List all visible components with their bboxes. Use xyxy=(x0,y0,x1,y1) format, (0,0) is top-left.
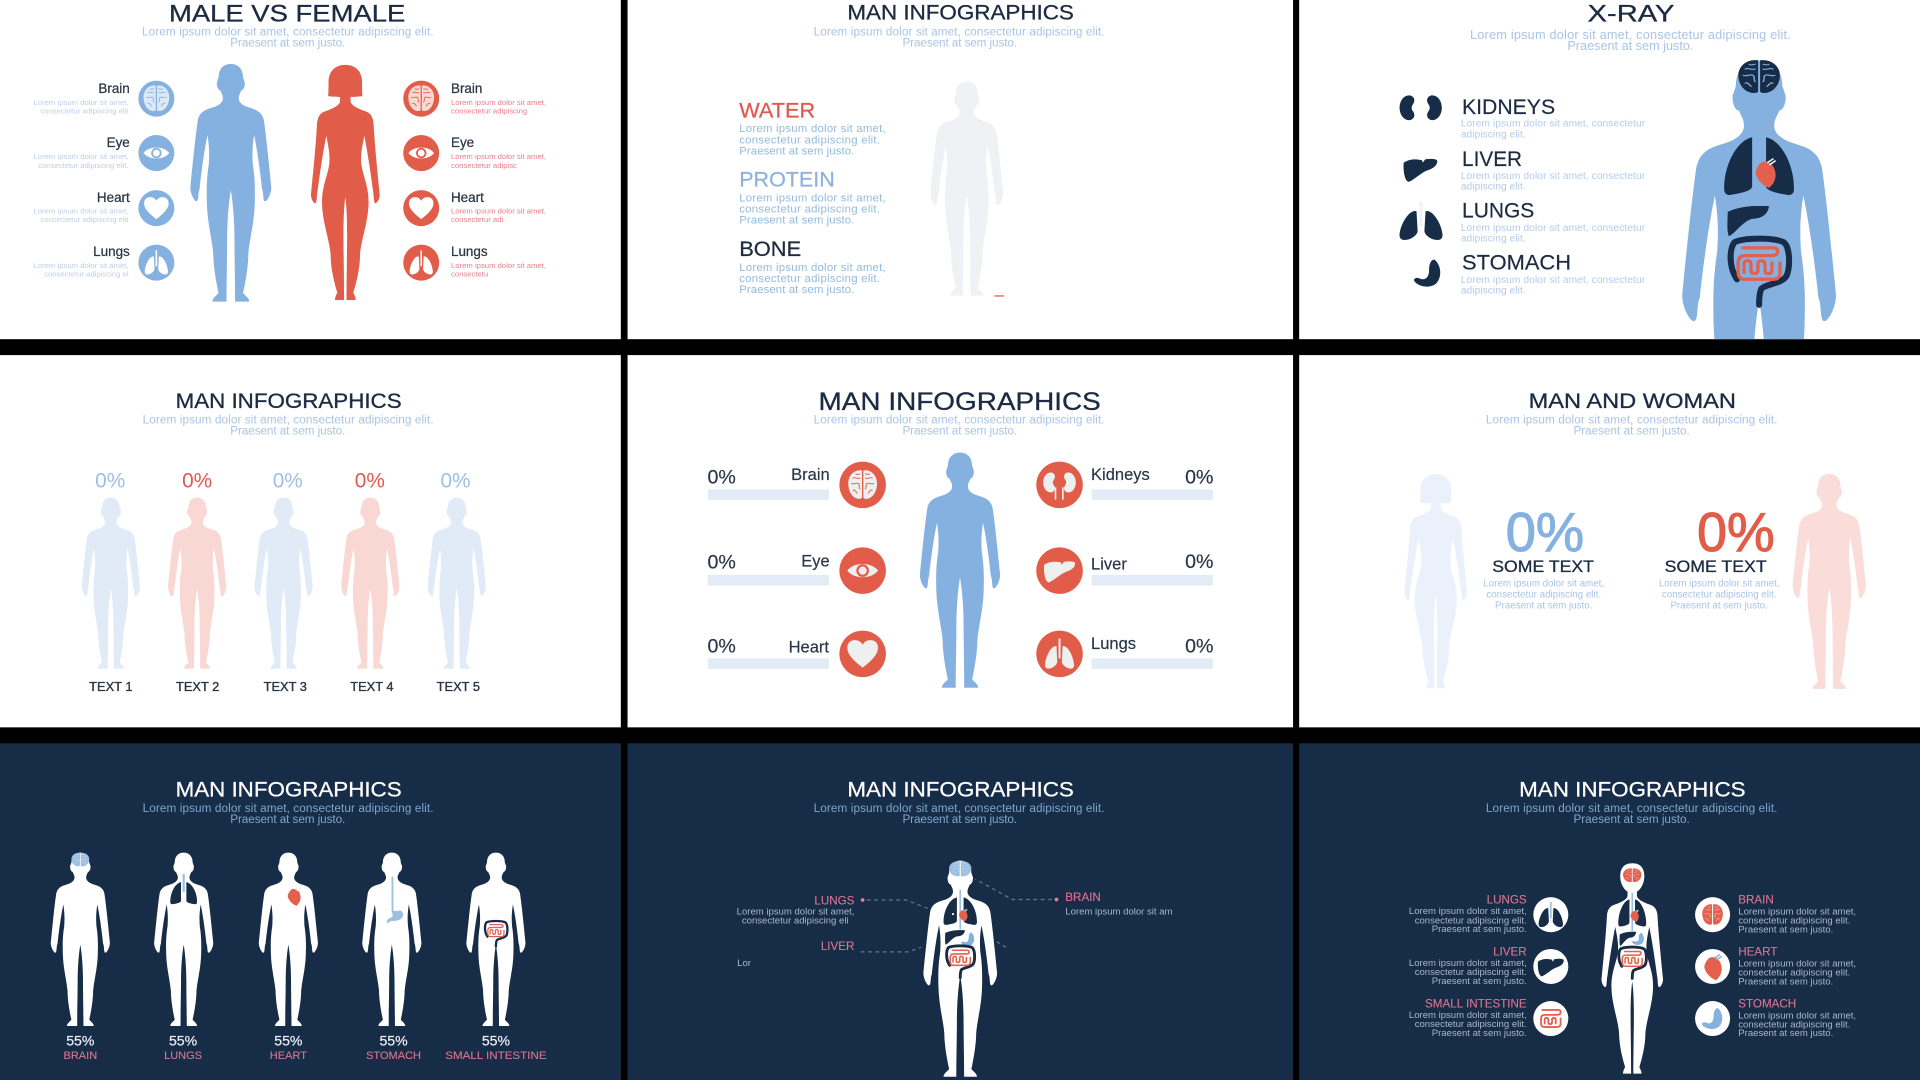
figure: x-ray man with organs xyxy=(1682,60,1836,340)
item: heart xyxy=(1695,945,1856,987)
figure: woman with organs xyxy=(1601,863,1663,1074)
block: water: Lorem ipsum dolor sit amet, xyxy=(739,123,886,135)
block: bone: consectetur adipiscing elit. xyxy=(739,273,880,285)
row: liver: Liver xyxy=(1091,554,1127,573)
block: water: consectetur adipiscing elit. xyxy=(739,134,880,146)
row: kidneys: Kidneys xyxy=(1091,465,1150,484)
item: small intestine: consectetur adipiscing elit. xyxy=(1415,1019,1527,1030)
title: MAN INFOGRAPHICS xyxy=(819,388,1101,416)
left item: brain: consectetur adipiscing elit xyxy=(40,107,129,116)
panel: male vs female xyxy=(0,0,621,339)
subtitle: Lorem ipsum dolor sit amet, consectetur adipiscing elit. xyxy=(143,802,433,815)
item: brain: Lorem ipsum dolor sit amet, xyxy=(1738,906,1856,917)
item: stomach xyxy=(1461,250,1646,297)
block: water: WATER xyxy=(739,99,815,122)
icon: lungs xyxy=(1400,201,1443,240)
icon: kidneys xyxy=(1400,95,1442,120)
row: liver: 0% xyxy=(1185,551,1213,573)
icon: liver xyxy=(1404,159,1437,182)
column 5 xyxy=(428,469,486,694)
figure: stomach 55%: 55% xyxy=(379,1033,408,1049)
item: stomach: STOMACH xyxy=(1738,998,1796,1011)
figure: small intestine 55%: 55% xyxy=(482,1033,510,1049)
column 3: 0% xyxy=(273,469,303,492)
left item: eye: Eye xyxy=(107,135,130,150)
subtitle: Praesent at sem justo. xyxy=(230,813,345,826)
panel: five figures percentages xyxy=(0,355,621,727)
subtitle: Lorem ipsum dolor sit amet, consectetur adipiscing elit. xyxy=(1470,27,1791,42)
block: protein: Praesent at sem justo. xyxy=(739,215,854,227)
figure: brain 55% xyxy=(51,853,110,1062)
figure: lungs 55%: 55% xyxy=(169,1033,198,1049)
callout: lungs: LUNGS xyxy=(814,895,855,908)
right item: eye: consectetur adipisc xyxy=(451,161,517,170)
figure: man xyxy=(920,453,1000,688)
panel: dark five organ figures xyxy=(0,743,621,1080)
stat: left: 0% xyxy=(1506,501,1584,563)
title: X-RAY xyxy=(1588,0,1674,27)
figure: small intestine 55%: SMALL INTESTINE xyxy=(445,1050,547,1062)
stat: left: SOME TEXT xyxy=(1492,557,1594,576)
left item: eye xyxy=(34,135,174,171)
item: brain: BRAIN xyxy=(1738,894,1774,907)
left item: lungs: consectetur adipiscing el xyxy=(44,270,129,279)
subtitle: Praesent at sem justo. xyxy=(230,37,345,50)
item: stomach: Praesent at sem justo. xyxy=(1738,1028,1833,1039)
item: lungs: LUNGS xyxy=(1487,894,1527,907)
block: bone: BONE xyxy=(739,238,801,261)
subtitle xyxy=(1486,414,1777,438)
stat: right: SOME TEXT xyxy=(1665,557,1767,576)
row: kidneys: 0% xyxy=(1185,466,1213,488)
callout: liver: Lor xyxy=(737,958,752,969)
left item: heart: consectetur adipiscing elit xyxy=(40,215,129,224)
item: lungs: Lorem ipsum dolor sit amet, xyxy=(1409,906,1527,917)
figure: lungs 55%: LUNGS xyxy=(164,1050,202,1062)
right item: eye xyxy=(403,135,546,171)
item: lungs xyxy=(1461,199,1646,245)
subtitle: Lorem ipsum dolor sit amet, consectetur adipiscing elit. xyxy=(814,802,1104,815)
figure: brain 55%: BRAIN xyxy=(63,1050,97,1062)
left item: lungs xyxy=(34,244,174,281)
figure: heart 55%: 55% xyxy=(274,1033,303,1049)
right item: brain: Lorem ipsum dolor sit amet, xyxy=(451,98,546,107)
block: bone xyxy=(739,238,886,296)
subtitle xyxy=(814,413,1104,438)
title: MAN INFOGRAPHICS xyxy=(847,2,1074,25)
row: lungs: 0% xyxy=(1185,636,1213,658)
item: liver: Lorem ipsum dolor sit amet, xyxy=(1409,958,1527,969)
row: heart: 0% xyxy=(708,636,736,658)
block: bone: Praesent at sem justo. xyxy=(739,284,854,296)
connector stub xyxy=(997,942,1006,947)
item: lungs: LUNGS xyxy=(1462,199,1534,223)
column 1: 0% xyxy=(95,469,125,492)
figure: lungs 55% xyxy=(154,853,213,1062)
subtitle: Praesent at sem justo. xyxy=(902,425,1017,438)
item: liver: consectetur adipiscing elit. xyxy=(1415,967,1527,978)
title: male vs female: MALE VS FEMALE xyxy=(169,1,405,28)
item: liver: Lorem ipsum dolor sit amet, consectetur xyxy=(1461,171,1646,182)
item: stomach: STOMACH xyxy=(1462,250,1571,274)
figure: male xyxy=(190,64,271,302)
item: stomach xyxy=(1695,998,1856,1039)
item: kidneys: adipiscing elit. xyxy=(1461,130,1526,141)
left item: brain: Lorem ipsum dolor sit amet, xyxy=(34,98,129,107)
column 5: TEXT 5 xyxy=(437,679,480,694)
right item: brain: Brain xyxy=(451,81,482,96)
item: brain: consectetur adipiscing elit. xyxy=(1738,916,1850,927)
right item: eye: Eye xyxy=(451,135,474,150)
row: heart: Heart xyxy=(789,637,829,656)
item: liver xyxy=(1409,945,1568,987)
subtitle xyxy=(143,414,433,438)
block: protein: Lorem ipsum dolor sit amet, xyxy=(739,193,886,205)
column 3 xyxy=(254,469,313,694)
panel: x-ray xyxy=(1299,0,1920,340)
subtitle: Lorem ipsum dolor sit amet, consectetur adipiscing elit. xyxy=(142,26,433,39)
figure: stomach 55%: STOMACH xyxy=(366,1050,421,1062)
figure: stomach 55% xyxy=(362,853,421,1062)
left item: heart: Heart xyxy=(97,190,130,205)
item: small intestine: Lorem ipsum dolor sit amet, xyxy=(1409,1010,1527,1021)
figure: small intestine 55% xyxy=(445,853,547,1062)
figure: man with organs xyxy=(923,861,997,1077)
item: lungs xyxy=(1409,894,1568,935)
row: brain: 0% xyxy=(708,466,736,488)
item: heart: Praesent at sem justo. xyxy=(1738,976,1833,987)
figure: brain 55%: 55% xyxy=(66,1033,95,1049)
item: lungs: Lorem ipsum dolor sit amet, consectetur xyxy=(1461,223,1646,234)
subtitle: Lorem ipsum dolor sit amet, consectetur adipiscing elit. xyxy=(814,413,1104,426)
block: bone: Lorem ipsum dolor sit amet, xyxy=(739,262,886,274)
figure: heart 55% xyxy=(259,853,318,1062)
item: stomach: adipiscing elit. xyxy=(1461,286,1526,297)
item: small intestine xyxy=(1409,998,1568,1039)
title: MAN AND WOMAN xyxy=(1529,390,1736,413)
figure: female xyxy=(311,65,380,300)
item: stomach: Lorem ipsum dolor sit amet, xyxy=(1738,1010,1856,1021)
row: kidneys xyxy=(1036,462,1213,508)
row: lungs xyxy=(1036,631,1213,677)
figure: ghost woman xyxy=(1404,474,1467,688)
panel: man with organ progress bars xyxy=(628,355,1293,727)
callout: lungs: Lorem ipsum dolor sit amet, xyxy=(737,907,854,918)
subtitle: Praesent at sem justo. xyxy=(230,425,345,438)
title: MAN INFOGRAPHICS xyxy=(176,779,402,802)
callout: brain: BRAIN xyxy=(1065,891,1101,904)
callout: liver: LIVER xyxy=(821,940,854,953)
callout: lungs: consectetur adipiscing eli xyxy=(742,916,849,927)
figure: heart 55%: HEART xyxy=(270,1050,307,1062)
right item: lungs: Lorem ipsum dolor sit amet, xyxy=(451,261,546,270)
right item: heart: Heart xyxy=(451,190,484,205)
item: kidneys: Lorem ipsum dolor sit amet, consectetur xyxy=(1461,119,1646,130)
figure: ghost man xyxy=(930,82,1003,295)
subtitle: Praesent at sem justo. xyxy=(902,813,1017,826)
column 1: TEXT 1 xyxy=(89,679,132,694)
subtitle: Praesent at sem justo. xyxy=(1573,425,1690,438)
subtitle xyxy=(1486,802,1777,826)
right item: lungs: consectetu xyxy=(451,270,488,279)
column 4 xyxy=(341,469,399,694)
subtitle xyxy=(1470,27,1791,53)
marker: red dash xyxy=(994,295,1004,297)
block: water xyxy=(739,99,886,157)
column 2 xyxy=(168,469,226,694)
row: heart xyxy=(708,631,886,677)
stat: left: Lorem ipsum dolor sit amet, xyxy=(1483,578,1604,589)
item: lungs: adipiscing elit. xyxy=(1461,234,1526,245)
left item: eye: consectetur adipiscing elit. xyxy=(38,161,129,170)
title: MAN INFOGRAPHICS xyxy=(1519,779,1746,802)
item: liver: adipiscing elit. xyxy=(1461,182,1526,193)
panel: water protein bone xyxy=(628,0,1293,339)
item: liver: LIVER xyxy=(1462,147,1522,171)
subtitle: Praesent at sem justo. xyxy=(902,37,1017,50)
left item: heart xyxy=(34,190,174,226)
right item: brain xyxy=(403,81,546,117)
item: liver: Praesent at sem justo. xyxy=(1432,976,1527,987)
block: protein: consectetur adipiscing elit. xyxy=(739,204,880,216)
item: brain xyxy=(1695,894,1856,935)
left item: brain: Brain xyxy=(98,81,130,96)
left item: eye: Lorem ipsum dolor sit amet, xyxy=(34,152,129,161)
block: water: Praesent at sem justo. xyxy=(739,145,854,157)
panel: dark woman with organ list xyxy=(1299,743,1920,1080)
title: MAN INFOGRAPHICS xyxy=(176,390,402,413)
right item: heart: consectetur adi xyxy=(451,215,504,224)
right item: brain: consectetur adipiscing xyxy=(451,107,527,116)
stat: left: consectetur adipiscing elit. xyxy=(1486,589,1601,600)
item: stomach: Lorem ipsum dolor sit amet, consectetur xyxy=(1461,275,1646,286)
item: liver: LIVER xyxy=(1493,945,1527,958)
column 4: TEXT 4 xyxy=(350,679,394,694)
item: liver xyxy=(1461,147,1646,193)
left item: brain xyxy=(34,81,174,117)
callout: brain: Lorem ipsum dolor sit am xyxy=(1065,907,1173,918)
stat: right: Praesent at sem justo. xyxy=(1671,600,1768,611)
item: kidneys: KIDNEYS xyxy=(1462,95,1555,119)
panel: dark man with callouts xyxy=(628,743,1293,1080)
subtitle xyxy=(142,26,433,50)
panel: man and woman xyxy=(1299,355,1920,727)
left item: lungs: Lorem ipsum dolor sit amet, xyxy=(34,261,129,270)
item: small intestine: SMALL INTESTINE xyxy=(1425,998,1527,1011)
column 1 xyxy=(82,469,140,694)
column 4: 0% xyxy=(355,469,385,492)
stat: right: consectetur adipiscing elit. xyxy=(1662,589,1777,600)
stat: right xyxy=(1659,501,1780,611)
column 2: 0% xyxy=(182,469,212,492)
column 5: 0% xyxy=(440,469,471,492)
row: brain xyxy=(708,462,886,508)
item: heart: consectetur adipiscing elit. xyxy=(1738,967,1850,978)
right item: heart: Lorem ipsum dolor sit amet, xyxy=(451,207,546,216)
item: lungs: consectetur adipiscing elit. xyxy=(1415,915,1527,926)
block: protein xyxy=(739,169,886,227)
subtitle: Praesent at sem justo. xyxy=(1567,38,1693,53)
right item: heart xyxy=(403,190,546,226)
row: eye: Eye xyxy=(801,552,830,571)
stat: right: Lorem ipsum dolor sit amet, xyxy=(1659,578,1780,589)
row: eye xyxy=(708,547,886,594)
right item: lungs xyxy=(403,244,546,281)
subtitle xyxy=(143,802,433,826)
row: eye: 0% xyxy=(708,552,736,574)
subtitle: Lorem ipsum dolor sit amet, consectetur adipiscing elit. xyxy=(143,414,433,427)
icon: stomach xyxy=(1414,260,1440,287)
subtitle: Lorem ipsum dolor sit amet, consectetur adipiscing elit. xyxy=(1486,414,1777,427)
row: liver xyxy=(1036,547,1213,594)
stat: right: 0% xyxy=(1697,501,1775,563)
column 2: TEXT 2 xyxy=(176,679,219,694)
item: stomach: consectetur adipiscing elit. xyxy=(1738,1019,1850,1030)
item: heart: HEART xyxy=(1738,945,1777,958)
item: kidneys xyxy=(1461,95,1646,141)
item: brain: Praesent at sem justo. xyxy=(1738,924,1833,935)
row: lungs: Lungs xyxy=(1091,634,1136,653)
right item: lungs: Lungs xyxy=(451,244,488,259)
subtitle xyxy=(814,802,1104,826)
figure: ghost man xyxy=(1793,474,1866,689)
subtitle: Praesent at sem justo. xyxy=(1573,813,1690,826)
left item: heart: Lorem ipsum dolor sit amet, xyxy=(34,207,129,216)
stat: left: Praesent at sem justo. xyxy=(1495,600,1592,611)
subtitle: Lorem ipsum dolor sit amet, consectetur adipiscing elit. xyxy=(814,26,1104,39)
title: MAN INFOGRAPHICS xyxy=(847,779,1074,802)
item: lungs: Praesent at sem justo. xyxy=(1432,924,1527,935)
column 3: TEXT 3 xyxy=(264,679,307,694)
left item: lungs: Lungs xyxy=(93,244,130,259)
block: protein: PROTEIN xyxy=(739,169,835,192)
row: brain: Brain xyxy=(791,465,830,484)
item: small intestine: Praesent at sem justo. xyxy=(1432,1028,1527,1039)
right item: eye: Lorem ipsum dolor sit amet, xyxy=(451,152,546,161)
subtitle: Lorem ipsum dolor sit amet, consectetur adipiscing elit. xyxy=(1486,802,1777,815)
item: heart: Lorem ipsum dolor sit amet, xyxy=(1738,958,1856,969)
callout: lungs xyxy=(737,895,928,927)
subtitle xyxy=(814,26,1104,50)
callout: brain xyxy=(975,879,1173,918)
callout: liver xyxy=(737,940,921,969)
stat: left xyxy=(1483,501,1604,611)
